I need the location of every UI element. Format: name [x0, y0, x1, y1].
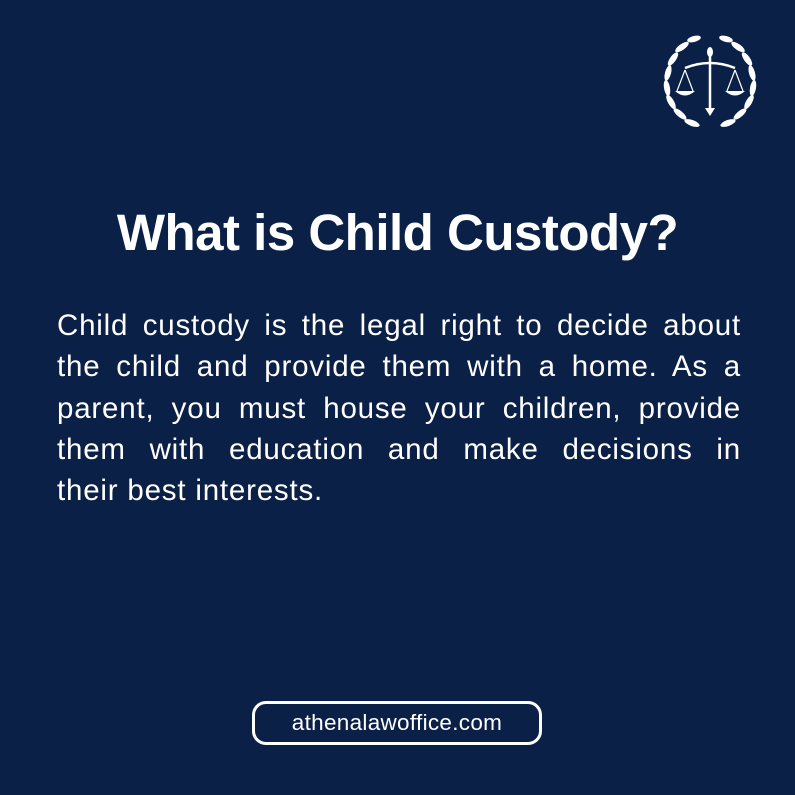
text block: definition: parent, you must house your children, provide [57, 392, 741, 425]
text block: definition: the child and provide them with a home. As a [57, 350, 741, 383]
laurel leaves [663, 34, 757, 129]
scales [709, 50, 711, 110]
title: What is Child Custody? [117, 204, 678, 261]
text block: definition: Child custody is the legal right to decide about [57, 309, 741, 342]
text block: definition: them with education and make decisions in [57, 433, 741, 466]
text block: definition [57, 309, 741, 507]
text block: definition: their best interests. [57, 474, 323, 507]
logo: scales of justice with laurel [664, 36, 756, 127]
website pill: athenalawoffice.com [292, 710, 502, 735]
website pill [252, 701, 542, 745]
